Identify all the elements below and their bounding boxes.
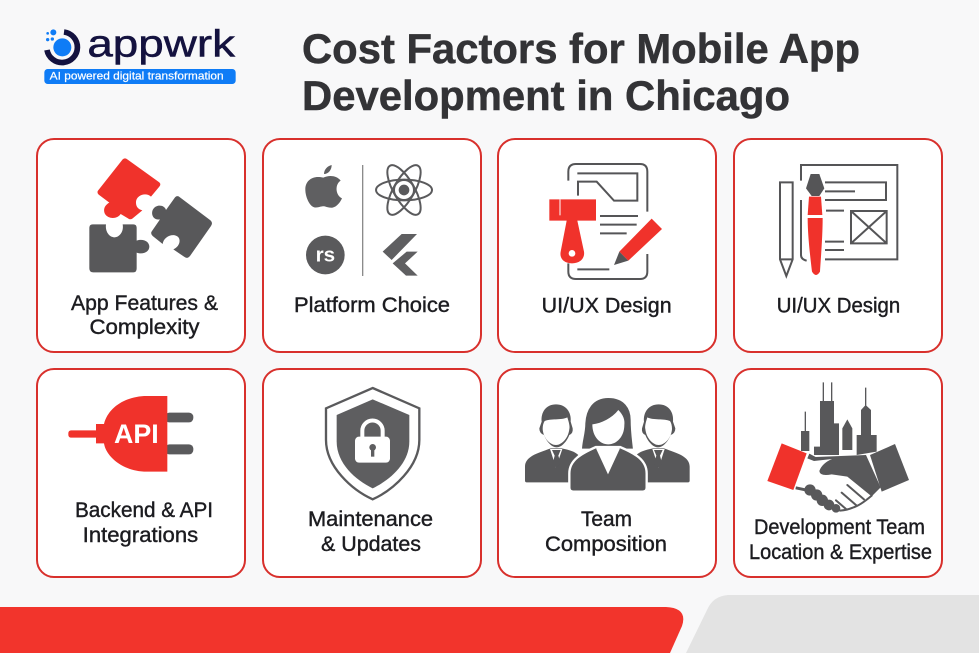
label: Complexity — [90, 316, 200, 339]
icon: three people — [525, 397, 690, 492]
label: Composition — [545, 533, 667, 556]
icon: API plug — [68, 396, 193, 472]
title: Development in Chicago — [302, 72, 790, 119]
panel: app features and complexity — [37, 139, 245, 352]
panel: platform choice — [263, 139, 481, 352]
panel: backend and API integrations — [37, 369, 245, 577]
icon: shield with padlock — [326, 388, 419, 499]
label: UI/UX Design — [542, 294, 672, 318]
label: & Updates — [321, 533, 421, 556]
label: Team — [581, 508, 632, 531]
label: Development Team — [754, 516, 925, 539]
label: Maintenance — [308, 508, 433, 531]
icon: brush and pencil on document — [549, 164, 662, 279]
label: Backend & API — [75, 499, 213, 522]
footer band: red — [0, 607, 683, 653]
label: Platform Choice — [294, 294, 450, 317]
panel: maintenance and updates — [263, 369, 481, 577]
label: Location & Expertise — [749, 541, 932, 564]
title — [302, 25, 860, 119]
label: App Features & — [71, 292, 218, 315]
panel: development team location and expertise — [734, 369, 942, 577]
icon: pencil, paintbrush and wireframe — [780, 165, 897, 276]
label — [545, 508, 667, 556]
footer band: grey — [686, 595, 979, 653]
panel: team composition — [498, 369, 716, 577]
icon: API plug: API — [114, 419, 159, 449]
label: Integrations — [83, 524, 198, 547]
panel: UI/UX design document — [498, 139, 716, 352]
label — [749, 516, 932, 564]
label — [75, 499, 213, 547]
label: UI/UX Design — [777, 294, 900, 318]
icon: platform logos: rs — [316, 243, 335, 266]
icon: platform logos — [305, 161, 432, 276]
icon: puzzle pieces — [89, 158, 212, 272]
logo: appwrk — [44, 24, 236, 84]
label — [308, 508, 433, 556]
title: Cost Factors for Mobile App — [302, 25, 860, 72]
logo: appwrk: appwrk — [87, 24, 236, 66]
logo: appwrk: AI powered digital transformation — [50, 71, 224, 83]
icon: Chicago skyline and handshake — [767, 382, 909, 513]
panel: UI/UX design wireframe — [734, 139, 942, 352]
label — [71, 292, 218, 339]
